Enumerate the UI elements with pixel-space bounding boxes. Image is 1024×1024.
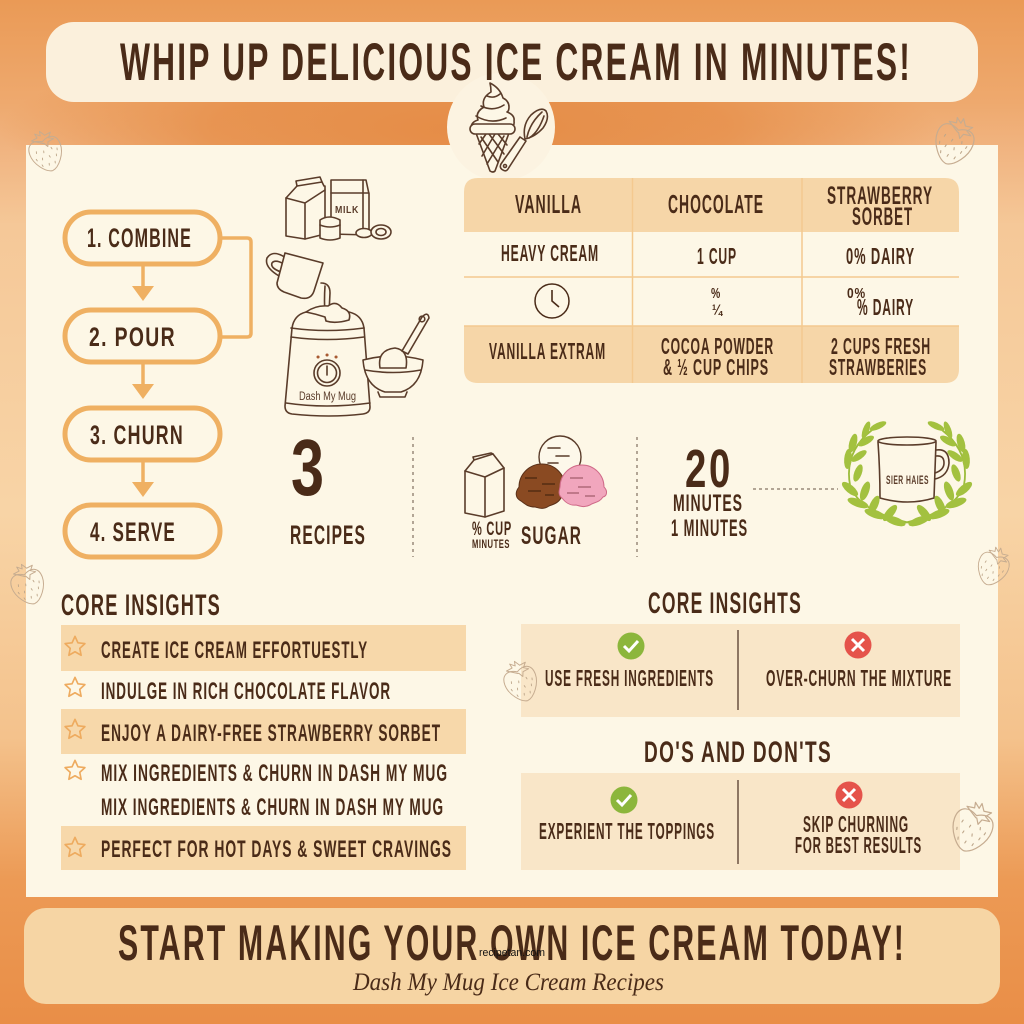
row: flavor ingredients: VANILLA EXTRAM: [489, 338, 606, 364]
icon: mug in laurel wreath: SIER HAIES: [886, 473, 929, 487]
row: clock and fractions: [535, 284, 914, 320]
panel: do's and don'ts: [521, 736, 960, 870]
time stat: 1 MINUTES: [671, 515, 748, 542]
row: cream: 1 CUP: [697, 243, 737, 269]
panel: core insights do and don't: CORE INSIGHTS: [648, 587, 802, 620]
icon: milk cartons and ingredients: MILK: [335, 205, 359, 216]
row: flavor ingredients: STRAWBERIES: [829, 354, 927, 380]
sugar stat: MINUTES: [472, 537, 510, 551]
recipe comparison table: [464, 178, 959, 383]
icon: cross: [844, 632, 872, 658]
flow steps: [65, 212, 251, 557]
icon: carton and ice cream scoops: [465, 436, 607, 517]
sugar stat: % CUP: [472, 519, 512, 540]
step 2: 2. POUR: [89, 322, 176, 352]
row: cream: HEAVY CREAM: [501, 240, 599, 266]
row: clock and fractions: % DAIRY: [857, 294, 914, 320]
time stat: [671, 439, 748, 542]
step 1: [65, 212, 220, 264]
icon: pouring jug into Dash My Mug machine with bowl and scoop: [266, 253, 429, 416]
title banner: [46, 22, 978, 102]
panel: core insights list: [61, 589, 466, 870]
row: cream: [501, 240, 915, 269]
row: flavor ingredients: [489, 333, 931, 380]
row: cream: 0% DAIRY: [846, 243, 915, 269]
dotted divider: [413, 437, 637, 557]
insight 1: CREATE ICE CREAM EFFORTUESTLY: [101, 637, 368, 664]
insight 1: [65, 636, 368, 664]
footer banner: recipetan.com: [479, 947, 545, 959]
time stat: 20: [685, 439, 733, 499]
recipes stat: [290, 423, 366, 550]
heading: core insights: CORE INSIGHTS: [61, 589, 221, 622]
insight 5: [65, 836, 452, 863]
decorative strawberries: [5, 112, 1014, 858]
arrow 2: [141, 364, 145, 388]
insight 4: [65, 760, 448, 821]
footer banner: Dash My Mug Ice Cream Recipes: [352, 969, 664, 996]
icon: cross: [836, 782, 862, 808]
sugar stat: SUGAR: [521, 522, 582, 550]
arrow 1: [141, 266, 145, 290]
table header: STRAWBERRY: [827, 182, 933, 210]
time stat: MINUTES: [673, 490, 743, 517]
row: flavor ingredients: 2 CUPS FRESH: [831, 333, 931, 359]
step 3: [65, 408, 220, 460]
insight 3: ENJOY A DAIRY-FREE STRAWBERRY SORBET: [101, 720, 441, 747]
panel: core insights do and don't: [521, 587, 960, 717]
table header: VANILLA: [515, 189, 582, 219]
main cream panel: [26, 145, 998, 897]
row: clock and fractions: %: [711, 285, 721, 302]
step 2: [65, 310, 220, 362]
row: flavor ingredients: & ½ CUP CHIPS: [663, 354, 769, 380]
row: clock and fractions: ¼: [712, 302, 723, 319]
step 4: 4. SERVE: [90, 517, 176, 547]
panel: do's and don'ts: DO'S AND DON'TS: [644, 736, 832, 769]
table header: [515, 182, 933, 231]
icon: pouring jug into Dash My Mug machine with bowl and scoop: Dash My Mug: [299, 391, 356, 403]
recipes stat: 3: [291, 423, 324, 512]
panel: do's and don'ts: EXPERIENT THE TOPPINGS: [539, 818, 715, 844]
step 4: [65, 505, 220, 557]
dotted connector: [753, 488, 838, 490]
icon: milk cartons and ingredients: [286, 177, 391, 240]
panel: do's and don'ts: SKIP CHURNING: [803, 811, 909, 837]
footer banner: [24, 908, 1000, 1004]
connector from step 1 to step 2: [221, 238, 251, 337]
icon: ice cream cone and whisk: [470, 83, 547, 172]
icon: check: [610, 786, 638, 814]
icon: mug in laurel wreath: [840, 419, 974, 529]
insight 4: MIX INGREDIENTS & CHURN IN DASH MY MUG: [101, 794, 444, 821]
sugar stat: [472, 519, 582, 551]
step 3: 3. CHURN: [90, 420, 184, 450]
row: flavor ingredients: COCOA POWDER: [661, 333, 774, 359]
insight 3: [65, 719, 441, 747]
insight 2: [65, 677, 391, 705]
recipes stat: RECIPES: [290, 520, 366, 550]
panel: core insights do and don't: USE FRESH INGREDIENTS: [545, 665, 714, 691]
icon: check: [618, 632, 644, 660]
insight 2: INDULGE IN RICH CHOCOLATE FLAVOR: [101, 678, 391, 705]
arrow 3: [141, 462, 145, 484]
row: clock and fractions: 0%: [847, 285, 866, 302]
table header: SORBET: [852, 203, 913, 231]
icon backdrop circle: [447, 73, 555, 181]
insight 4: MIX INGREDIENTS & CHURN IN DASH MY MUG: [101, 760, 448, 787]
step 1: 1. COMBINE: [87, 223, 192, 253]
table header: CHOCOLATE: [668, 189, 764, 219]
insight 5: PERFECT FOR HOT DAYS & SWEET CRAVINGS: [101, 836, 452, 863]
